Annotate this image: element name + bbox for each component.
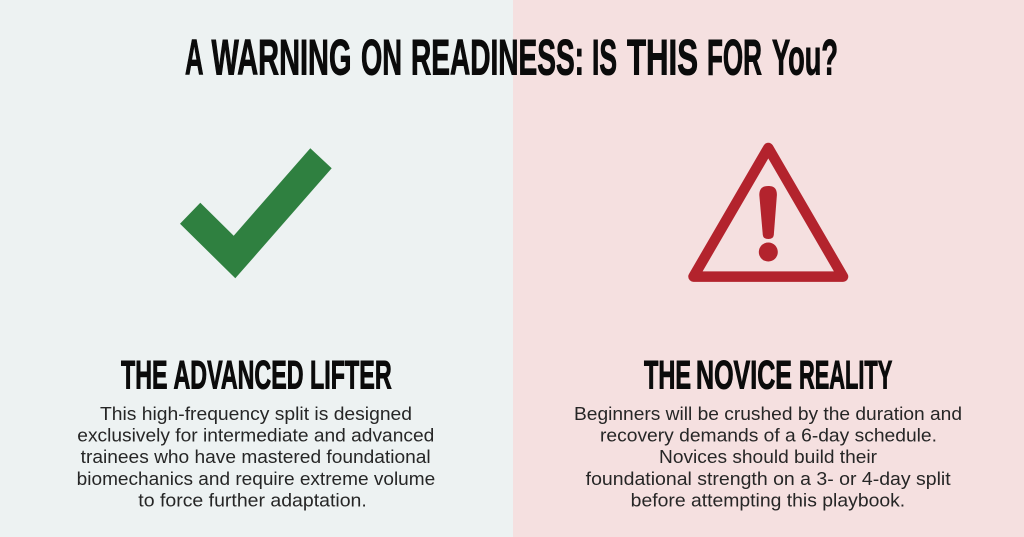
heading: the advanced lifter: LIFTER bbox=[310, 354, 392, 398]
text block: advanced lifter description: This high-frequency split is designed bbox=[100, 404, 412, 424]
text block: novice reality description: before attempting this playbook. bbox=[631, 491, 905, 511]
text block: advanced lifter description bbox=[77, 404, 435, 511]
title: FOR bbox=[707, 30, 762, 86]
title: A bbox=[185, 30, 204, 86]
heading: the novice reality: NOVICE bbox=[696, 354, 792, 398]
title: You? bbox=[772, 30, 838, 86]
heading: the advanced lifter: THE bbox=[121, 354, 168, 398]
text block: novice reality description: Beginners will be crushed by the duration and bbox=[574, 404, 962, 424]
text block: advanced lifter description: trainees who have mastered foundational bbox=[81, 447, 431, 467]
text block: novice reality description: recovery demands of a 6-day schedule. bbox=[600, 426, 937, 446]
title: THIS bbox=[627, 30, 698, 86]
text block: novice reality description: Novices should build their bbox=[659, 447, 877, 467]
heading: the advanced lifter: ADVANCED bbox=[174, 354, 304, 398]
heading: the novice reality bbox=[644, 354, 892, 398]
panel: advanced lifter background bbox=[0, 0, 513, 537]
title: WARNING bbox=[212, 30, 352, 86]
panel: novice reality background bbox=[513, 0, 1024, 537]
text block: novice reality description: foundational strength on a 3- or 4-day split bbox=[586, 469, 951, 489]
title: IS bbox=[592, 30, 617, 86]
heading: the novice reality: THE bbox=[644, 354, 691, 398]
icon: green check mark bbox=[180, 148, 332, 278]
title: ON bbox=[361, 30, 402, 86]
text block: advanced lifter description: to force further adaptation. bbox=[138, 491, 367, 511]
icon: red warning triangle bbox=[694, 148, 843, 277]
title bbox=[185, 30, 838, 86]
text block: advanced lifter description: biomechanics and require extreme volume bbox=[77, 469, 435, 489]
text block: advanced lifter description: exclusively for intermediate and advanced bbox=[77, 426, 434, 446]
heading: the novice reality: REALITY bbox=[799, 354, 892, 398]
title: READINESS: bbox=[411, 30, 584, 86]
text block: novice reality description bbox=[574, 404, 962, 511]
